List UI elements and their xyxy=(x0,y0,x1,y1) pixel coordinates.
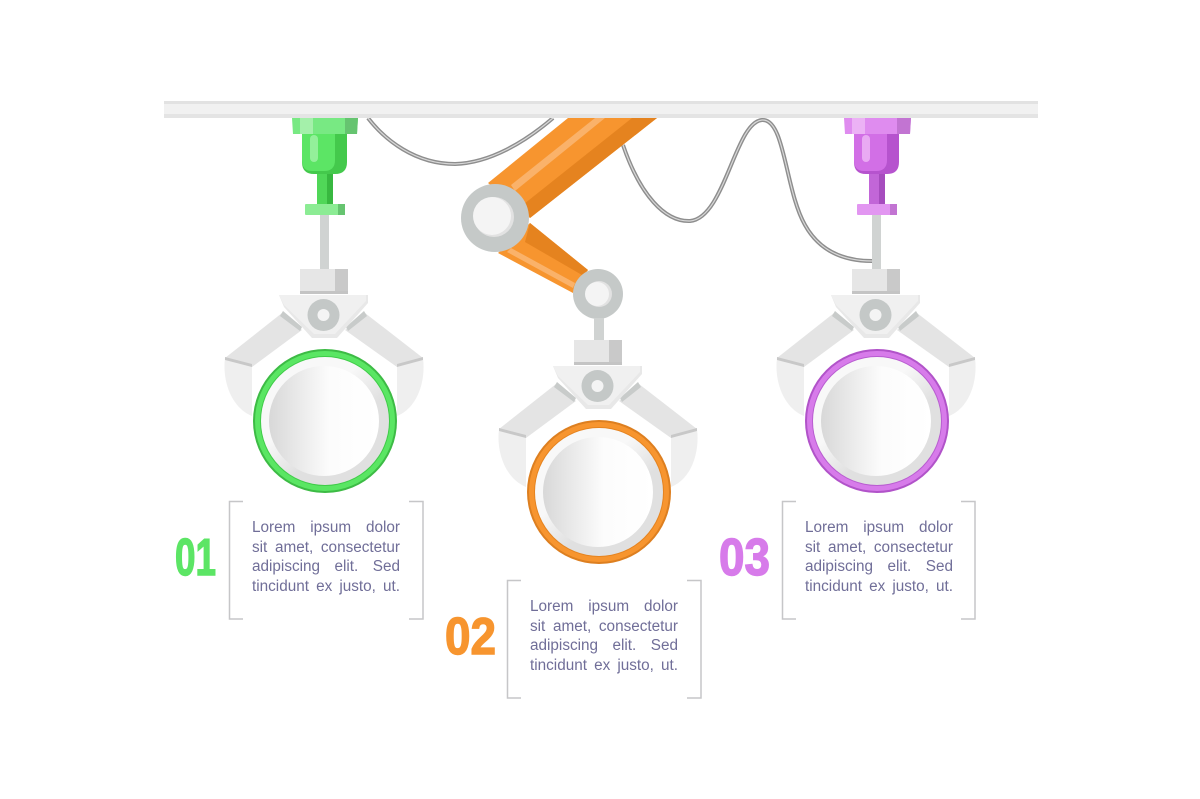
text block 2: sit amet, consectetur xyxy=(530,618,678,634)
bracket 1 xyxy=(230,502,423,619)
ceiling rail xyxy=(164,101,1038,118)
text block 3: adipiscing elit. Sed xyxy=(805,558,953,575)
number 01: 01 xyxy=(175,529,216,587)
text block 1 xyxy=(252,519,400,594)
gripper 3: purple xyxy=(776,269,976,493)
gripper 2: orange xyxy=(498,340,698,564)
arm: lower segment xyxy=(498,223,588,293)
text block 3: Lorem ipsum dolor xyxy=(805,519,953,536)
text block 2: Lorem ipsum dolor xyxy=(530,598,678,615)
text block 3 xyxy=(805,519,953,594)
claw body xyxy=(776,269,976,416)
number 02: 02 xyxy=(445,608,496,666)
cable: right xyxy=(623,120,872,261)
claw body xyxy=(224,269,424,416)
text block 2: adipiscing elit. Sed xyxy=(530,637,678,654)
text block 1: tincidunt ex justo, ut. xyxy=(252,578,400,594)
mount: green xyxy=(292,118,358,269)
ring xyxy=(527,420,671,564)
bracket 2 xyxy=(508,580,701,698)
arm: upper segment xyxy=(488,118,657,218)
mount: purple xyxy=(844,118,911,269)
text block 1: Lorem ipsum dolor xyxy=(252,519,400,536)
claw body xyxy=(498,340,698,487)
bracket 3 xyxy=(782,502,975,619)
number 03: 03 xyxy=(719,529,770,587)
robotic arm: orange xyxy=(461,118,657,319)
ring xyxy=(253,349,397,493)
joint: small xyxy=(573,269,623,319)
text block 3: tincidunt ex justo, ut. xyxy=(805,578,953,594)
rod: center xyxy=(594,318,604,340)
text block 2: tincidunt ex justo, ut. xyxy=(530,656,678,674)
cable: left xyxy=(368,118,553,164)
ring xyxy=(805,349,949,493)
text block 3: sit amet, consectetur xyxy=(805,538,953,556)
joint: large xyxy=(461,184,529,252)
text block 1: sit amet, consectetur xyxy=(252,538,400,556)
gripper 1: green xyxy=(224,269,424,493)
text block 2 xyxy=(530,598,678,674)
text block 1: adipiscing elit. Sed xyxy=(252,558,400,575)
